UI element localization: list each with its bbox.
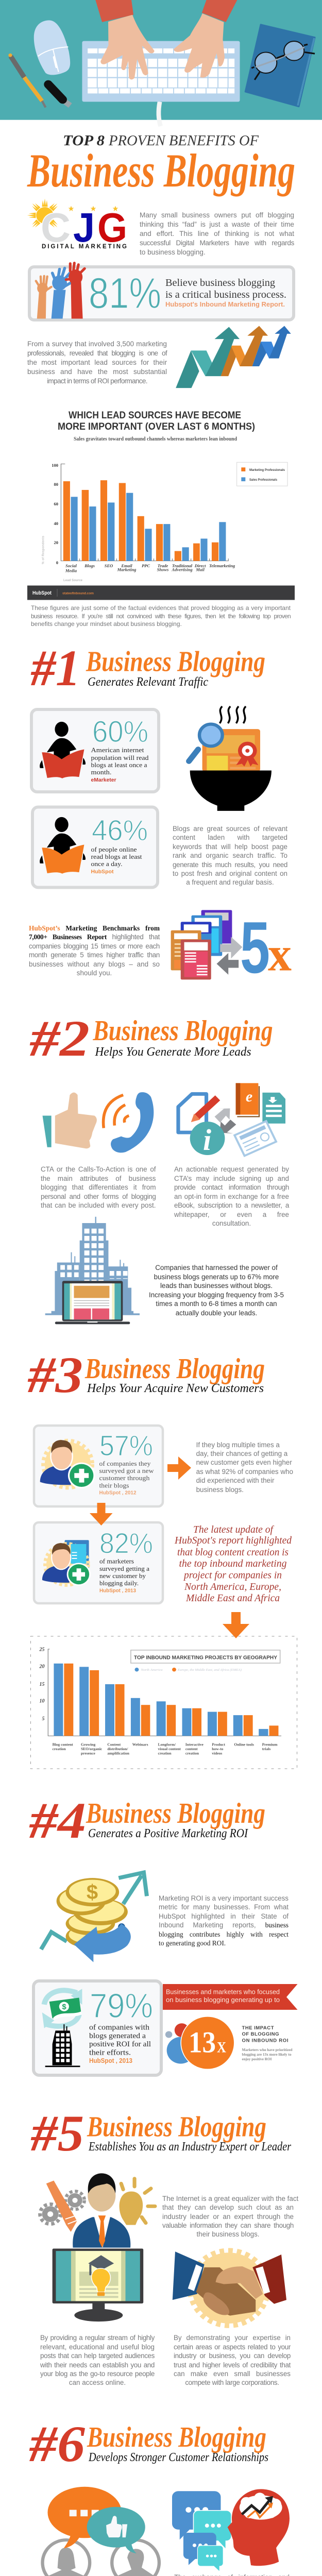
logo: CJG Digital Marketing [27, 198, 127, 250]
chart: which lead sources have become more important [27, 410, 295, 600]
panel: 81% stat [29, 263, 294, 320]
axis labels, legend and chart title: SEO/organic [81, 1747, 103, 1751]
text block: demonstrating expertise: can make even small businesses [174, 2370, 291, 2378]
axis and legend labels: Sales Professionals [249, 478, 278, 482]
text block: companies generate more leads: Companies that harnessed the power of [155, 1264, 278, 1272]
text block: HubSpot benchmarks: month generate 5 times higher traffic than [29, 951, 160, 959]
axis and legend labels: Traditional [172, 563, 193, 568]
axis labels, legend and chart title: Premium [262, 1742, 278, 1747]
panel: 57% stat [34, 1426, 163, 1506]
stat caption: blogging daily. [99, 1579, 139, 1587]
axis labels, legend and chart title: amplification [107, 1751, 130, 1755]
icon: office buildings with laptop [45, 1217, 140, 1324]
text block: HubSpot benchmarks: companies blogging 15 times or more each [29, 942, 160, 950]
icon: coin stack with growth arrow: $ [87, 1881, 98, 1904]
icon: thumbs up and phone call [43, 1092, 154, 1153]
text block: figures: These figures are just some of the factual evidences that proved blogging as a very important [31, 604, 291, 612]
text block: useful blog posts: relevant, educational and useful blog [40, 2343, 155, 2351]
text block: impact of blogging on inbound ROI: Marketers who have prioritized [242, 2048, 293, 2052]
icon: chat bubbles and thinking head [172, 2489, 290, 2571]
axis and legend labels: SEO [105, 563, 113, 568]
text block: demonstrating expertise: industry or business, you can develop [174, 2352, 291, 2360]
text block: CTA definition: the main attributes of business [41, 1175, 156, 1182]
icon: expert behind monitor with ideas [40, 2173, 155, 2321]
callout: HubSpot report quote: The latest update of [193, 1524, 274, 1535]
icon: five times traffic documents [171, 907, 292, 989]
text block: impact of blogging on inbound ROI: OF BLOGGING [242, 2031, 279, 2037]
heading: benefit 6 [29, 2415, 268, 2472]
chart title [58, 410, 255, 442]
text block: intro: thinking this “fad” is just a waste of their time [140, 221, 294, 228]
axis and legend labels: 0 [56, 560, 58, 565]
heading: benefit 1 [30, 639, 265, 697]
axis and legend labels: Trade [158, 563, 168, 568]
text block: internet equalizer: valuable information they can share though [162, 2222, 294, 2229]
text block: marketing ROI [159, 1894, 289, 1947]
stat caption: their efforts. [89, 2048, 131, 2057]
text block: figures: business resource. If you’re still not convinced with these figures, then let the following top proven [31, 613, 291, 620]
text block: marketing ROI: metric for many businesses. From what [159, 1903, 289, 1911]
text block: survey: From a survey that involved 3,500 marketing [27, 340, 167, 348]
text block: intro: to business blogging. [140, 248, 206, 256]
heading: benefit 6: Develops Stronger Customer Relationships [88, 2451, 268, 2464]
title: TOP 8 [63, 133, 105, 149]
icon: five times traffic documents: 5 [240, 907, 270, 989]
text block: HubSpot benchmarks: 7,000+ Businesses Report highlighted that [29, 933, 160, 941]
text block: intro: successful Digital Marketers have with regards [140, 239, 294, 247]
icon: USB stick [48, 84, 70, 106]
text block: internet equalizer: that they can develop such clout as an [162, 2204, 294, 2211]
text block: intro: Many small business owners put off blogging [140, 211, 294, 218]
chart title: Sales gravitates toward outbound channels whereas marketers lean inbound [74, 436, 237, 442]
text block: survey: business and have the most substantial [27, 368, 167, 376]
axis labels, legend and chart title: presence [81, 1751, 95, 1755]
text block: internet equalizer: industry leader or an expert through the [162, 2212, 294, 2221]
heading: benefit 4: Generates a Positive Marketing ROI [88, 1827, 248, 1840]
axis labels, legend and chart title: 20 [39, 1664, 44, 1670]
heading: benefit 4: #4 [29, 1792, 86, 1849]
axis and legend labels: Lead Source [63, 579, 83, 582]
text block: blogs are great sources: a frequent and regular basis. [186, 878, 274, 886]
text block: actionable request [174, 1165, 290, 1227]
source bar: HubSpot: stateofinbound.com [62, 591, 94, 596]
stat caption: new customer by [99, 1572, 146, 1580]
text block: impact of blogging on inbound ROI: enjoy positive ROI [242, 2058, 272, 2061]
stat caption [89, 2024, 151, 2064]
axis labels, legend and chart title: 15 [39, 1682, 44, 1687]
text block: actionable request: an opt-in form in exchange for a free [174, 1192, 289, 1200]
stat caption: is a critical business process. [165, 289, 286, 300]
stat caption [91, 746, 149, 783]
axis and legend labels: Social [65, 563, 77, 568]
axis and legend labels: % of Respondents [42, 535, 45, 564]
text block: multiple times a day: as what 92% of companies who [196, 1468, 293, 1476]
heading: benefit 3: Helps Your Acquire New Customers [87, 1382, 264, 1395]
icon: handshake [173, 2251, 286, 2325]
text block: blogs are great sources: rank and organic search traffic. To [173, 852, 287, 859]
stat caption [91, 845, 142, 875]
stat caption: blogs at least once a [91, 761, 147, 769]
text block: CTA definition [41, 1165, 156, 1209]
axis and legend labels: Marketing Professionals [249, 468, 285, 472]
text block: HubSpot benchmarks [29, 924, 160, 977]
arrow: between the stat panels [90, 1503, 112, 1526]
stat caption: of marketers [99, 1557, 134, 1565]
icon: new customer with plus badge [40, 1440, 95, 1488]
stat caption: eMarketer [91, 777, 116, 783]
stat caption: surveyed got a new [99, 1467, 154, 1475]
heading: benefit 4: Business Blogging [86, 1798, 265, 1829]
text block: demonstrating expertise: compete with large corporations. [185, 2379, 279, 2386]
axis and legend labels: Mail [195, 567, 205, 572]
text block: survey: the most important lead sources for their [27, 359, 167, 366]
heading: benefit 1: Generates Relevant Traffic [88, 675, 208, 689]
axis labels, legend and chart title: Longform/ [158, 1742, 176, 1747]
icon: notebook with glasses [245, 25, 315, 107]
text block: blogs are great sources [173, 825, 287, 886]
text block: useful blog posts [40, 2334, 155, 2386]
text block: multiple times a day: new customer gets even higher [196, 1459, 292, 1466]
axis labels, legend and chart title: Webinars [132, 1742, 148, 1747]
heading: benefit 5: Establishes You as an Industry Expert or Leader [88, 2140, 292, 2154]
text block: actionable request: consultation. [212, 1219, 251, 1227]
text block: demonstrating expertise: By demonstrating your expertise in [174, 2334, 291, 2342]
heading: benefit 6: #6 [29, 2415, 85, 2472]
stat caption: Believe business blogging [165, 277, 275, 289]
stat: 57%: 57% [99, 1429, 153, 1462]
text block: actionable request: CTA’s may include signing up and [174, 1175, 289, 1182]
logo: CJG Digital Marketing: J [73, 205, 95, 250]
axis labels, legend and chart title: 25 [39, 1647, 44, 1653]
axis labels, legend and chart title: Product [212, 1742, 225, 1747]
stat caption: HubSpot , 2013 [99, 1588, 136, 1594]
heading: benefit 1: #1 [30, 639, 80, 697]
banner: red ribbon: on business blogging generating up to [166, 1996, 280, 2004]
logo: CJG Digital Marketing: C [41, 205, 71, 250]
axis and legend labels: Advertising [171, 567, 193, 572]
arrow: down to geography chart [223, 1612, 249, 1638]
axis and legend labels [42, 463, 285, 582]
icon: pen [8, 54, 45, 108]
stat: 82%: 82% [99, 1527, 153, 1559]
title: PROVEN BENEFITS OF [108, 133, 259, 149]
axis labels, legend and chart title: creation [185, 1751, 199, 1755]
heading: benefit 5: Business Blogging [87, 2111, 266, 2143]
icon: two people with speech bubbles [43, 2487, 159, 2576]
stat caption: blogs generated a [89, 2032, 146, 2040]
arrow: to the right of the 57% panel [167, 1456, 191, 1480]
axis labels, legend and chart title: Content [107, 1742, 121, 1747]
axis and legend labels: 20 [54, 540, 58, 545]
heading: benefit 1: Business Blogging [86, 646, 265, 678]
text block: companies generate more leads: leads than businesses without blogs. [160, 1282, 273, 1290]
heading: benefit 6: Business Blogging [87, 2421, 266, 2453]
heading: benefit 2: #2 [29, 1010, 90, 1067]
callout: HubSpot report quote: Middle East and Africa [185, 1592, 280, 1604]
text block: useful blog posts: By providing a regular stream of highly [40, 2334, 155, 2342]
axis labels, legend and chart title: how-to [212, 1747, 224, 1751]
text block: impact of blogging on inbound ROI: THE IMPACT [242, 2025, 274, 2031]
text block: marketing ROI: Marketing ROI is a very important success [159, 1894, 289, 1902]
text block: actionable request: An actionable request generated by [174, 1165, 289, 1173]
text block: marketing ROI: Inbound Marketing reports, business [159, 1921, 289, 1929]
text block: HubSpot benchmarks: should you. [77, 969, 112, 977]
chart: top inbound marketing projects by geography [31, 1636, 297, 1769]
legend [237, 462, 287, 486]
text block: impact of blogging on inbound ROI: ON INBOUND ROI [242, 2038, 289, 2044]
text block: internet equalizer [162, 2195, 299, 2238]
icon: lead capture documents, info and email: e [246, 1088, 252, 1105]
text block: survey: professionals, revealed that blogging is one of [27, 349, 167, 357]
text block: actionable request: provide contact information through [174, 1183, 289, 1191]
stat caption: customer through [99, 1474, 150, 1482]
stat caption: read blogs at least [91, 853, 142, 860]
text block: survey [27, 340, 167, 385]
text block: multiple times a day: business blogs. [196, 1486, 244, 1494]
text block: CTA definition: that can be included with every post. [41, 1201, 156, 1209]
axis labels, legend and chart title: videos [212, 1751, 222, 1755]
stat caption: Hubspot's Inbound Marketing Report. [165, 301, 285, 308]
stat caption: American internet [91, 746, 144, 754]
text block: companies generate more leads: times a month to 6-8 times a month can [156, 1300, 277, 1308]
panel: 82% stat [34, 1522, 163, 1603]
heading: benefit 4 [29, 1792, 265, 1849]
stat caption [99, 1460, 154, 1496]
text block: companies generate more leads: business blogs generats up to 67% more [154, 1273, 279, 1281]
icon: computer mouse [34, 20, 70, 75]
stat caption: population will read [91, 754, 149, 761]
banner: red ribbon [163, 1984, 298, 2010]
icon: steaming bowl of web content with magnifier [189, 706, 272, 811]
panel: 79% stat [33, 1981, 161, 2075]
axis and legend labels: PPC [142, 563, 150, 568]
stat caption: HubSpot , 2012 [99, 1490, 137, 1496]
text block: useful blog posts: posts that can help targeted audiences [40, 2352, 155, 2360]
heading: benefit 3: Business Blogging [84, 1353, 265, 1385]
stat caption [165, 277, 286, 308]
text block: blogs are great sources: content laden with targeted [173, 834, 287, 841]
text block: useful blog posts: can access online. [69, 2379, 126, 2386]
callout: HubSpot report quote: that blog content creation is [177, 1547, 289, 1558]
stat caption: HubSpot , 2013 [89, 2057, 132, 2064]
stat: 81%: 81% [89, 269, 161, 317]
text block: CTA definition: CTA or the Calls-To-Action is one of [41, 1165, 156, 1173]
text block: intro [140, 211, 294, 256]
chart: 13x bubbles: X [217, 2039, 226, 2056]
callout: HubSpot report quote: North America, Europe, [184, 1581, 281, 1592]
stat caption: their blogs [99, 1482, 129, 1489]
text block: internet equalizer: their business blogs. [196, 2230, 260, 2238]
text block: figures [31, 604, 291, 628]
text block: multiple times a day [196, 1441, 293, 1494]
text block: intro: and effort. This line of thinking is not what [140, 230, 294, 238]
text block: multiple times a day: If they blog multiple times a [196, 1441, 280, 1449]
stat caption: positive ROI for all [89, 2040, 151, 2048]
text block: CTA definition: blogging that differentiates it from [41, 1183, 156, 1191]
icon: rising zigzag arrows [176, 326, 291, 388]
axis and legend labels: Direct [194, 563, 206, 568]
text block: CTA definition: personal and other forms of blogging [41, 1192, 156, 1200]
axis labels, legend and chart title: trials [262, 1747, 270, 1751]
axis labels, legend and chart title: 5 [42, 1716, 44, 1722]
text block: blogs are great sources: generate this much results, you need [173, 861, 287, 869]
heading: benefit 3 [27, 1346, 265, 1403]
icon: money cycle over office tower [42, 1989, 82, 2067]
stat caption: of companies they [99, 1460, 151, 1467]
axis labels, legend and chart title: 10 [39, 1699, 44, 1704]
logo: CJG Digital Marketing: G [97, 205, 127, 250]
text block: actionable request: whitepaper, or even a free [174, 1211, 289, 1218]
text block: internet equalizer: The Internet is a great equalizer with the fact [162, 2195, 298, 2202]
axis labels, legend and chart title: visual content [158, 1747, 181, 1751]
axis labels, legend and chart title: Interactive [185, 1742, 204, 1747]
text block: marketing ROI: blogging contributes highly with respect [159, 1930, 289, 1938]
stat: 60%: 60% [92, 715, 148, 749]
stat: 79%: 79% [90, 1987, 153, 2025]
stat caption [99, 1557, 149, 1594]
stat caption: of people online [91, 845, 137, 853]
icon: lead capture documents, info and email [178, 1083, 285, 1157]
icon: five times traffic documents: x [268, 927, 292, 981]
heading: benefit 5 [30, 2105, 292, 2162]
text block: demonstrating expertise: certain areas or aspects related to your [174, 2343, 291, 2351]
stat caption: month. [91, 768, 111, 776]
banner: red ribbon: Businesses and marketers who focused [166, 1989, 280, 1996]
text block: blogs are great sources: to post fresh and original content on [173, 870, 287, 877]
callout: HubSpot report quote: HubSpot's report highlighted [174, 1535, 292, 1546]
callout: HubSpot report quote: the top inbound marketing [179, 1558, 286, 1569]
bars and axes [61, 462, 287, 561]
text block: blogs are great sources: keywords that will help boost page [173, 843, 287, 851]
source bar: HubSpot: HubSpot [32, 590, 52, 596]
text block: figures: benefits change your mindset about business blogging. [31, 620, 182, 628]
icon: customer with screen and plus badge [42, 1540, 91, 1586]
axis and legend labels: Blogs [84, 563, 95, 568]
callout: HubSpot report quote: project for companies in [183, 1569, 282, 1581]
stat caption: HubSpot [91, 869, 114, 875]
heading: benefit 5: #5 [30, 2105, 84, 2162]
axis and legend labels: 100 [52, 463, 58, 468]
icon: coin stack with growth arrow [41, 1872, 147, 1962]
callout: HubSpot report quote [174, 1524, 292, 1604]
chart: 13x bubbles [165, 2016, 234, 2069]
axis labels, legend and chart title: creation [53, 1747, 66, 1751]
panel: 60% stat [31, 709, 159, 792]
axis labels, legend and chart title: distribution/ [107, 1747, 128, 1751]
axis labels, legend and chart title: content [185, 1747, 198, 1751]
text block: impact of blogging on inbound ROI [242, 2025, 293, 2061]
text block: marketing ROI: to generating good ROI. [159, 1939, 226, 1947]
heading: benefit 2 [29, 1010, 273, 1067]
bars and axes [48, 1649, 281, 1736]
text block: companies generate more leads: actually double your leads. [176, 1309, 257, 1317]
text block: useful blog posts: with their needs can establish you and [40, 2361, 155, 2369]
icon: money cycle over office tower: $ [62, 2003, 66, 2011]
axis and legend labels: Email [121, 563, 132, 568]
logo: CJG Digital Marketing: DIGITAL MARKETING [42, 244, 127, 250]
axis labels, legend and chart title: North America [140, 1668, 163, 1672]
text block: impact of blogging on inbound ROI: blogging are 13x more likely to [242, 2053, 292, 2057]
axis labels, legend and chart title [39, 1647, 278, 1755]
icon: reader with red book [40, 722, 86, 778]
axis and legend labels: Telemarketing [209, 563, 235, 568]
panel: 46% stat [32, 807, 158, 887]
axis labels, legend and chart title: Growing [81, 1742, 95, 1747]
stat: 46%: 46% [92, 814, 148, 847]
icon: keyboard cable [159, 101, 161, 126]
stat caption: once a day. [91, 860, 123, 868]
icon: reader with orange book [40, 817, 86, 874]
axis labels, legend and chart title: TOP INBOUND MARKETING PROJECTS BY GEOGRAPHY [134, 1654, 277, 1660]
axis labels, legend and chart title: Blog content [53, 1742, 73, 1747]
text block: multiple times a day: day, their chances of getting a [196, 1450, 287, 1458]
heading: benefit 3: #3 [27, 1346, 83, 1403]
axis and legend labels: 40 [54, 521, 58, 526]
axis and legend labels: 60 [54, 501, 58, 506]
axis and legend labels: Marketing [117, 567, 137, 572]
icon: lead capture documents, info and email: i [203, 1123, 211, 1157]
chart title: MORE IMPORTANT (OVER LAST 6 MONTHS) [58, 421, 255, 432]
icon: keyboard [82, 41, 240, 101]
axis labels, legend and chart title: creation [158, 1751, 172, 1755]
text block: demonstrating expertise: trust and higher levels of credibility that [174, 2361, 291, 2369]
axis and legend labels: Shows [157, 567, 169, 572]
chart: 13x bubbles: 13 [189, 2026, 216, 2059]
icon: raised hands [36, 263, 84, 318]
heading: benefit 2: Helps You Generate More Leads [95, 1045, 251, 1059]
text block: multiple times a day: did experienced with their [196, 1477, 274, 1484]
axis and legend labels: Media [65, 568, 77, 573]
hero illustration: desk seen from above [0, 0, 322, 126]
stat caption: surveyed getting a [99, 1565, 149, 1572]
text block: actionable request: eBook, subscription to a newsletter, a [174, 1201, 289, 1209]
source bar: HubSpot [27, 585, 295, 600]
text block: HubSpot benchmarks: HubSpot’s Marketing Benchmarks from [29, 924, 160, 931]
text block: blogs are great sources: Blogs are great sources of relevant [173, 825, 287, 833]
text block: demonstrating expertise [174, 2334, 291, 2386]
heading: benefit 2: Business Blogging [93, 1015, 273, 1047]
text block: useful blog posts: your blog as the go-to resource people [40, 2370, 155, 2378]
text block: survey: impact in terms of ROI performance. [47, 377, 147, 385]
text block: companies generate more leads [149, 1264, 284, 1317]
axis labels, legend and chart title: Europe, the Middle East, and Africa (EMEA) [177, 1668, 242, 1672]
chart title: WHICH LEAD SOURCES HAVE BECOME [69, 410, 241, 421]
axis and legend labels: 80 [54, 482, 58, 487]
text block: companies generate more leads: Increasing your blogging frequency from 3-5 [149, 1291, 284, 1298]
axis labels, legend and chart title: Online tools [234, 1742, 254, 1747]
text block: marketing ROI: HubSpot highlighted in their State of [159, 1912, 289, 1920]
stat caption: of companies with [89, 2024, 150, 2032]
icon: typing hands with red sleeves [95, 0, 237, 79]
text block: HubSpot benchmarks: businesses without any blogs – and so [29, 960, 160, 968]
